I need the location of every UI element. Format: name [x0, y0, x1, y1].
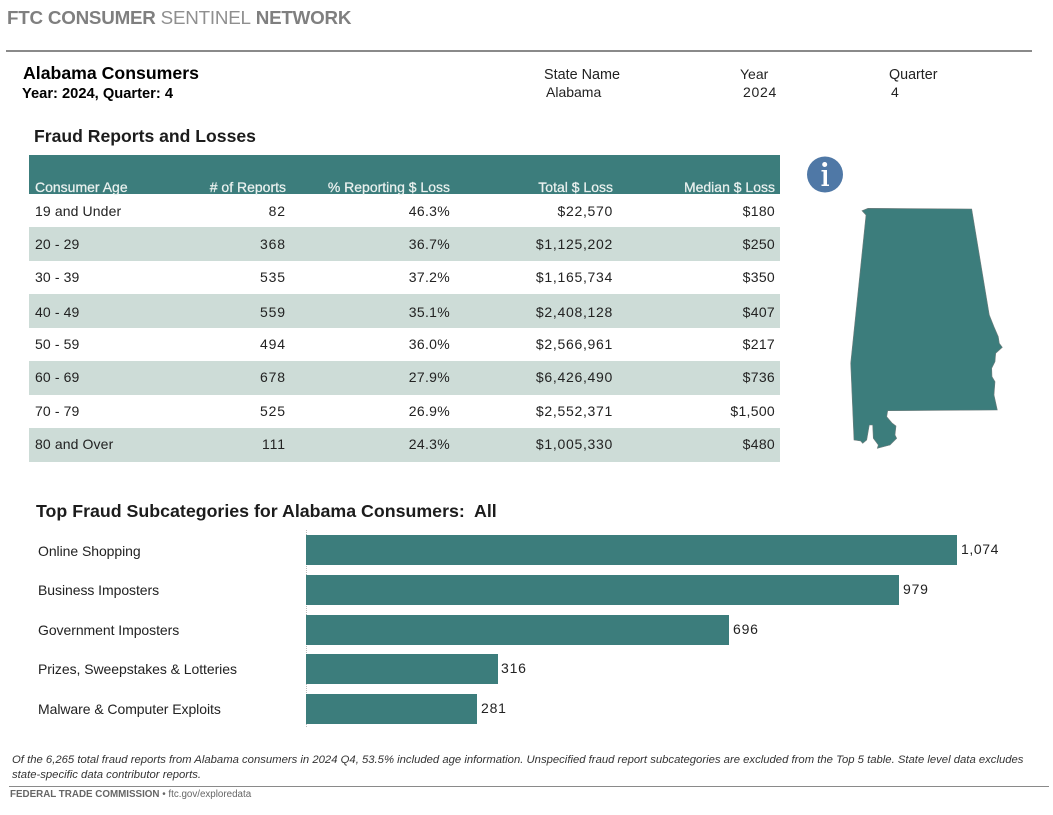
table: fraud reports and losses by age	[29, 155, 780, 462]
row: 50-59	[35, 336, 775, 352]
row: 20-29: $250	[743, 236, 775, 252]
row: 80 and over: 24.3%	[409, 436, 450, 452]
row: 50-59: 494	[260, 336, 286, 352]
filter: state name	[544, 67, 620, 100]
row: 30-39: 37.2%	[409, 269, 450, 285]
table header	[29, 155, 780, 194]
row: 80 and over: $1,005,330	[536, 436, 613, 452]
bar: online shopping	[38, 535, 999, 565]
subtitle: Year: 2024, Quarter: 4	[22, 86, 173, 102]
table header: Total $ Loss	[538, 179, 613, 195]
footer rule	[9, 786, 1049, 787]
row: 80 and over	[29, 428, 780, 462]
row: 20-29: 36.7%	[409, 236, 450, 252]
row: 70-79: 70 - 79	[35, 403, 79, 419]
filter: quarter: Quarter	[889, 67, 937, 83]
row: 19 and under: 82	[269, 203, 286, 219]
bar: government imposters	[38, 615, 759, 645]
row: 30-39: $350	[743, 269, 775, 285]
footnote: Of the 6,265 total fraud reports from Alabama consumers in 2024 Q4, 53.5% included age information. Unspecified fraud report subcategories are excluded from the Top 5 table. State level data excludes	[12, 754, 1023, 766]
row: 30-39	[35, 269, 775, 285]
row: 50-59: $2,566,961	[536, 336, 613, 352]
row: 60-69: 678	[260, 369, 286, 385]
row: 80 and over: 80 and Over	[35, 436, 113, 452]
bar: online shopping: 1,074	[961, 541, 999, 557]
row: 50-59: $217	[743, 336, 775, 352]
header title: FTC CONSUMER SENTINEL NETWORK	[7, 7, 351, 28]
bar: malware and computer exploits: Malware & Computer Exploits	[38, 701, 221, 717]
row: 20-29	[29, 227, 780, 261]
filter: year: Year	[740, 66, 768, 82]
row: 40-49: $2,408,128	[536, 304, 613, 320]
row: 60-69: $736	[743, 369, 775, 385]
row: 70-79: $2,552,371	[536, 403, 613, 419]
row: 70-79: 26.9%	[409, 403, 450, 419]
row: 40-49: $407	[743, 304, 775, 320]
row: 60-69: 27.9%	[409, 369, 450, 385]
row: 60-69: $6,426,490	[536, 369, 613, 385]
bar: malware and computer exploits: 281	[481, 700, 507, 716]
filter: state name: State Name	[544, 67, 620, 83]
bar chart: top fraud subcategories	[38, 530, 999, 727]
bar: government imposters: Government Imposters	[38, 622, 179, 638]
bar: prizes, sweepstakes and lotteries	[38, 654, 527, 684]
bar: malware and computer exploits	[38, 694, 507, 724]
row: 70-79: 525	[260, 403, 286, 419]
page title: Alabama Consumers	[23, 63, 199, 83]
footnote	[12, 754, 1024, 780]
table header: Median $ Loss	[684, 179, 775, 195]
row: 20-29: 368	[260, 236, 286, 252]
footnote: state-specific data contributor reports.	[12, 768, 201, 780]
icon: info	[807, 156, 843, 192]
row: 19 and under: $22,570	[557, 203, 613, 219]
row: 30-39: $1,165,734	[536, 269, 613, 285]
row: 60-69	[29, 361, 780, 395]
bar: prizes, sweepstakes and lotteries: Prizes, Sweepstakes & Lotteries	[38, 661, 237, 677]
row: 60-69: 60 - 69	[35, 369, 79, 385]
row: 40-49: 35.1%	[409, 304, 450, 320]
bar: business imposters: Business Imposters	[38, 582, 159, 598]
row: 19 and under: 46.3%	[409, 203, 450, 219]
filter: quarter	[889, 67, 938, 100]
row: 19 and under	[35, 203, 775, 219]
filter: state name: Alabama	[546, 84, 601, 100]
row: 80 and over: $480	[743, 436, 775, 452]
table header: Consumer Age	[35, 179, 128, 195]
row: 40-49: 559	[260, 304, 286, 320]
filter: year: 2024	[743, 84, 777, 100]
row: 20-29: $1,125,202	[536, 236, 613, 252]
table header: % Reporting $ Loss	[328, 179, 450, 195]
table header: # of Reports	[210, 179, 286, 195]
footer credit: FEDERAL TRADE COMMISSION • ftc.gov/exploredata	[10, 789, 251, 800]
row: 19 and under: $180	[743, 203, 775, 219]
row: 50-59: 50 - 59	[35, 336, 79, 352]
row: 20-29: 20 - 29	[35, 236, 79, 252]
bar: business imposters	[38, 575, 929, 605]
row: 30-39: 535	[260, 269, 286, 285]
row: 40-49	[29, 294, 780, 328]
row: 30-39: 30 - 39	[35, 269, 79, 285]
row: 50-59: 36.0%	[409, 336, 450, 352]
row: 70-79: $1,500	[730, 403, 775, 419]
bar: government imposters: 696	[733, 621, 759, 637]
map: Alabama	[850, 208, 1003, 449]
header rule	[6, 50, 1032, 52]
row: 80 and over: 111	[262, 436, 286, 452]
row: 70-79	[35, 403, 775, 419]
filter: year	[740, 66, 777, 100]
filter: quarter: 4	[891, 84, 899, 100]
row: 19 and under: 19 and Under	[35, 203, 121, 219]
bar: business imposters: 979	[903, 581, 929, 597]
section heading: fraud reports and losses: Fraud Reports and Losses	[34, 126, 256, 146]
row: 40-49: 40 - 49	[35, 304, 79, 320]
bar: online shopping: Online Shopping	[38, 543, 141, 559]
section heading: top fraud subcategories: Top Fraud Subcategories for Alabama Consumers: All	[36, 501, 497, 521]
bar: prizes, sweepstakes and lotteries: 316	[501, 660, 527, 676]
